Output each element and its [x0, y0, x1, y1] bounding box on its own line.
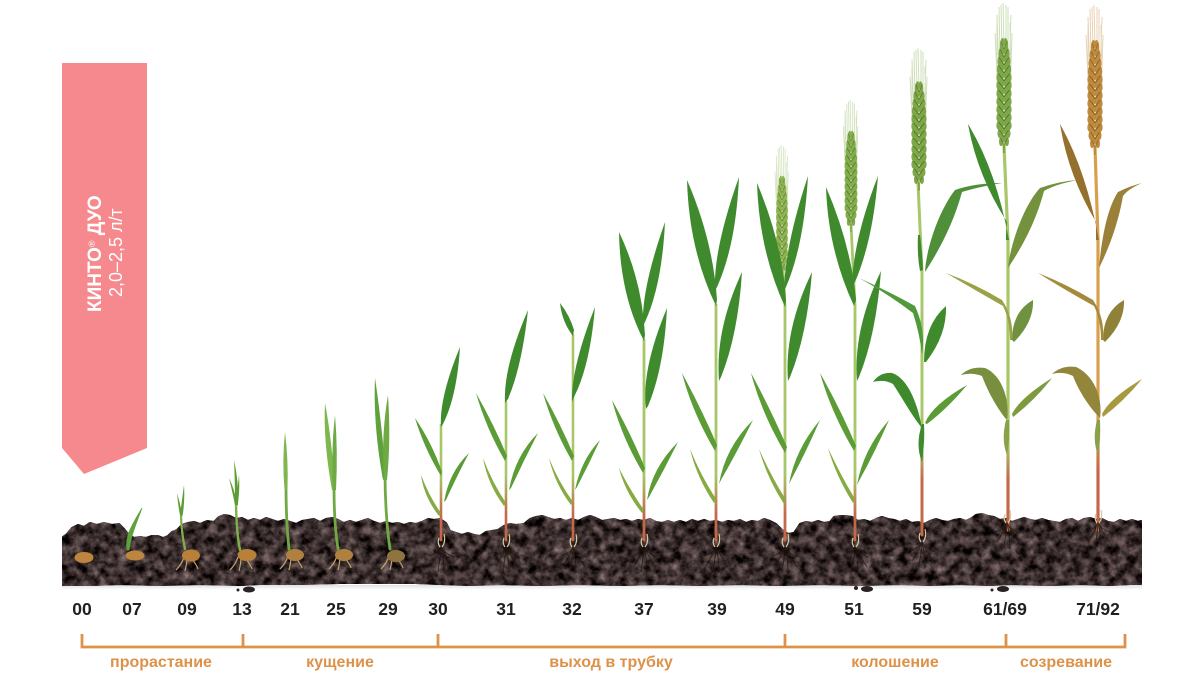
plant stage 29	[375, 378, 405, 570]
product name: ®	[87, 240, 97, 247]
growth stage numbers: 21	[280, 599, 300, 619]
plant stage 09	[176, 485, 200, 571]
growth stage numbers: 13	[232, 599, 252, 619]
growth stage numbers: 71/92	[1076, 599, 1120, 619]
growth stage numbers: 31	[496, 599, 516, 619]
product name: КИНТО	[85, 247, 106, 312]
growth stage numbers: 29	[378, 599, 398, 619]
growth stage numbers: 32	[562, 599, 582, 619]
plant stage 51	[820, 100, 889, 573]
phase labels: выход в трубку	[549, 654, 673, 671]
phase labels: прорастание	[110, 654, 212, 671]
phase labels	[110, 654, 1112, 671]
phase labels: кущение	[306, 654, 374, 671]
phase labels: созревание	[1020, 654, 1112, 671]
plant stage 32	[543, 303, 600, 573]
growth stage numbers: 51	[844, 599, 864, 619]
plant stage 61/69	[946, 3, 1078, 549]
plant stage 37	[612, 222, 678, 573]
plant stage 25	[325, 403, 353, 570]
dose: 2,0–2,5 л/т	[106, 208, 126, 297]
growth stage numbers: 49	[775, 599, 795, 619]
growth stage numbers: 00	[72, 599, 92, 619]
plant stage 00: seed	[74, 552, 94, 563]
plant stage 59	[859, 48, 1002, 568]
ribbon: product treatment KINTO DUO	[62, 63, 147, 474]
plant stage 07: sprout	[126, 508, 144, 560]
growth stage numbers: 07	[122, 599, 142, 619]
growth stage numbers	[72, 599, 1120, 619]
plant stage 13	[229, 460, 256, 571]
growth stage numbers: 30	[428, 599, 448, 619]
growth stage numbers: 09	[177, 599, 197, 619]
phase labels: колошение	[851, 654, 939, 671]
growth stage numbers: 37	[634, 599, 654, 619]
plant stage 21	[280, 432, 304, 570]
growth stage numbers: 59	[912, 599, 932, 619]
plant stage 39	[682, 177, 753, 573]
product name: ДУО	[85, 195, 106, 240]
soil strip	[62, 514, 1142, 592]
phase bracket	[82, 634, 1125, 647]
growth stage numbers: 39	[707, 599, 727, 619]
growth stage numbers: 61/69	[983, 599, 1027, 619]
plant stage 49: heading begins	[751, 145, 820, 573]
growth stage numbers: 25	[326, 599, 346, 619]
plant stage 31	[476, 310, 538, 573]
plant stage 71/92	[1038, 5, 1142, 549]
plant stage 30	[415, 347, 469, 573]
